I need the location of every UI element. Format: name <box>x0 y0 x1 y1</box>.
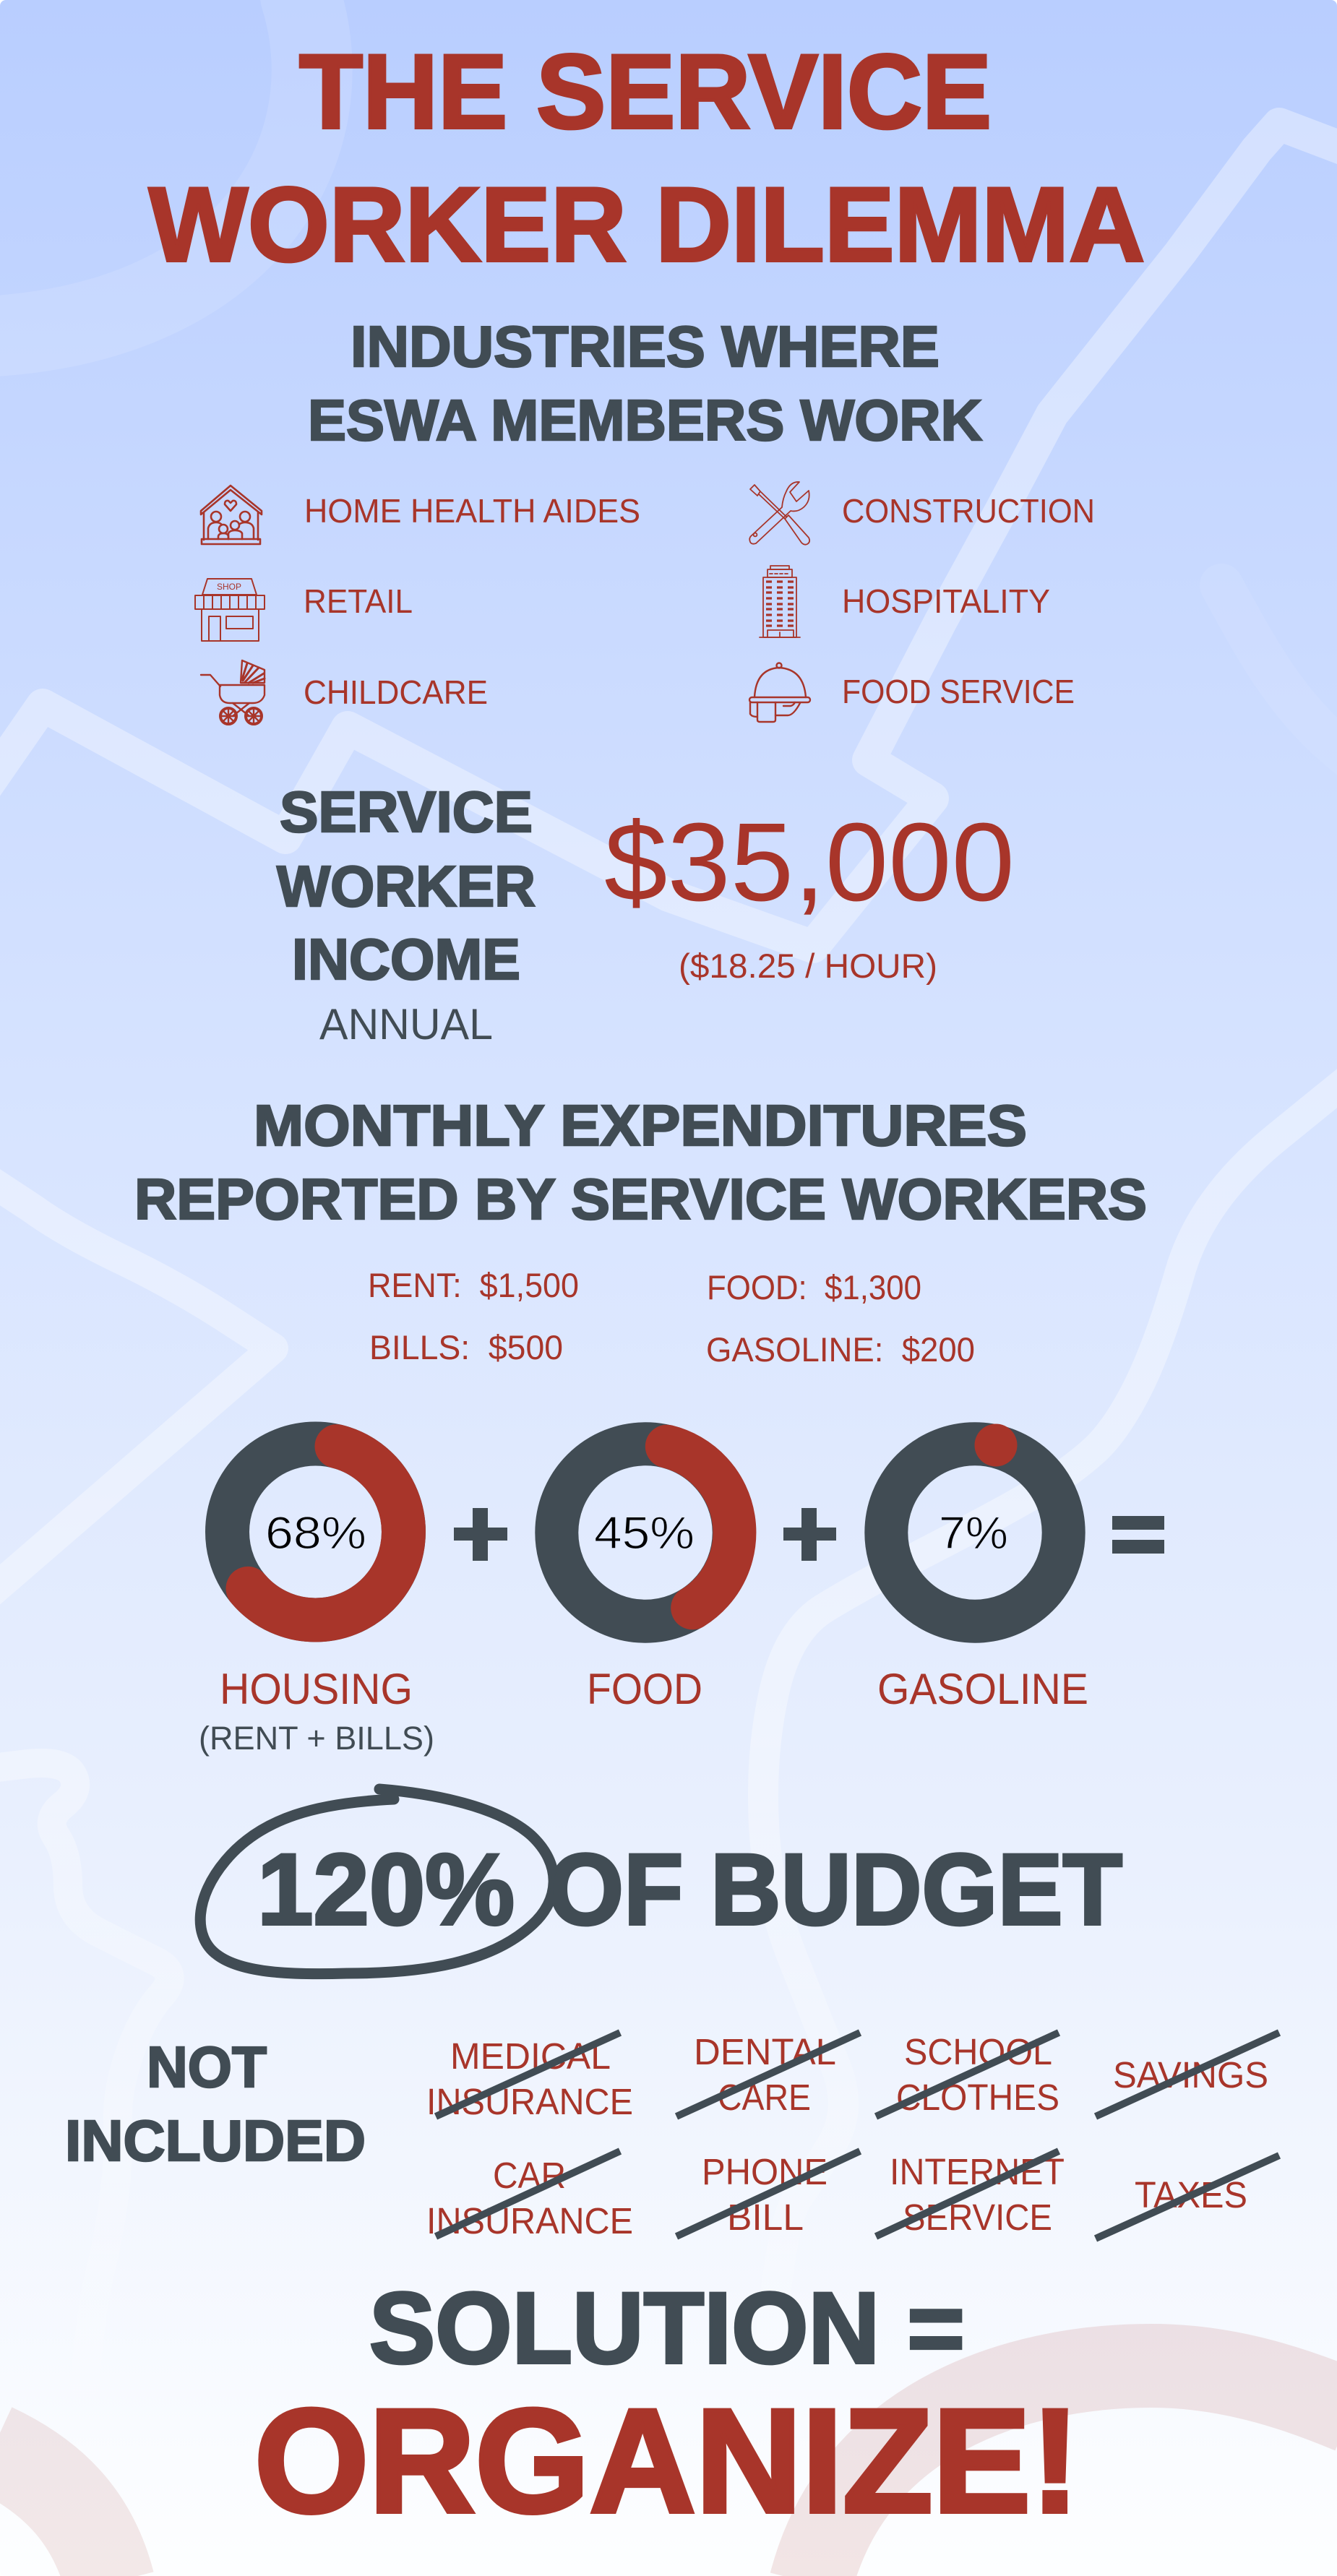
heading: industries: ESWA MEMBERS WORK <box>308 388 982 452</box>
icon: shop <box>195 579 265 641</box>
item: internet service: SERVICE <box>903 2197 1052 2238</box>
donut chart: housing: 68% <box>265 1508 366 1559</box>
expenditure amounts <box>368 1266 975 1369</box>
heading: monthly expenditures: MONTHLY EXPENDITURES <box>254 1093 1027 1158</box>
title: THE SERVICE <box>299 33 992 150</box>
not included heading: NOT <box>147 2035 267 2099</box>
heading: industries <box>308 314 982 452</box>
expenditure amounts: FOOD: $1,300 <box>707 1268 921 1306</box>
item: phone bill <box>676 2151 860 2238</box>
equals sign <box>1112 1516 1164 1554</box>
donut labels: GASOLINE <box>877 1665 1088 1713</box>
industries list <box>195 482 1095 724</box>
item: savings <box>1096 2033 1279 2116</box>
label: food service: FOOD SERVICE <box>842 673 1075 710</box>
donut chart: food: 45% <box>594 1508 695 1559</box>
not included heading: INCLUDED <box>65 2108 366 2173</box>
annual label: ANNUAL <box>319 1000 493 1048</box>
not included heading <box>65 2035 366 2173</box>
donut chart: gasoline: 7% <box>939 1508 1008 1559</box>
icon: shop: SHOP <box>217 582 241 592</box>
label: construction: CONSTRUCTION <box>842 492 1095 530</box>
120% of budget: 120% <box>257 1832 515 1946</box>
hand drawn circle <box>200 1789 554 1974</box>
service worker income heading <box>277 780 536 991</box>
icon: stroller <box>201 660 265 724</box>
icon: food cloche <box>749 663 810 722</box>
item: savings: SAVINGS <box>1113 2054 1268 2095</box>
label: retail: RETAIL <box>304 582 413 620</box>
item: internet service <box>876 2151 1065 2238</box>
item: school clothes <box>876 2031 1059 2118</box>
heading: industries: INDUSTRIES WHERE <box>351 314 940 379</box>
organize call to action: ORGANIZE! <box>254 2379 1080 2543</box>
item: phone bill: PHONE <box>702 2151 827 2192</box>
donut labels <box>220 1665 1088 1713</box>
icon: home health aides <box>201 486 262 544</box>
income amount: $35,000 <box>604 800 1015 924</box>
item: medical insurance: INSURANCE <box>426 2081 633 2122</box>
hourly rate: ($18.25 / HOUR) <box>679 947 937 985</box>
120% of budget: OF BUDGET <box>548 1832 1122 1946</box>
item: car insurance: CAR <box>493 2155 566 2196</box>
housing note: (RENT + BILLS) <box>199 1720 434 1757</box>
heading: monthly expenditures: REPORTED BY SERVICE WORKERS <box>134 1167 1147 1231</box>
donut chart: housing <box>227 1444 403 1620</box>
icon: hotel building <box>760 566 800 637</box>
label: childcare: CHILDCARE <box>304 673 488 711</box>
item: dental care: CARE <box>718 2077 811 2118</box>
120% of budget <box>257 1832 1122 1946</box>
service worker income heading: SERVICE <box>280 780 533 844</box>
item: car insurance: INSURANCE <box>426 2200 633 2241</box>
expenditure amounts: BILLS: $500 <box>369 1328 563 1366</box>
donut labels: HOUSING <box>220 1665 413 1713</box>
plus sign <box>454 1508 507 1561</box>
heading: monthly expenditures <box>134 1093 1147 1231</box>
item: phone bill: BILL <box>727 2197 804 2238</box>
donut labels: FOOD <box>587 1665 702 1713</box>
service worker income heading: INCOME <box>292 927 520 991</box>
crossed out items <box>426 2031 1279 2241</box>
item: medical insurance: MEDICAL <box>450 2036 611 2077</box>
item: dental care <box>676 2031 860 2118</box>
title <box>149 33 1145 283</box>
item: medical insurance <box>426 2033 633 2122</box>
item: school clothes: CLOTHES <box>896 2077 1059 2118</box>
item: internet service: INTERNET <box>890 2151 1065 2192</box>
item: taxes <box>1096 2155 1279 2239</box>
donut chart: food <box>556 1444 734 1621</box>
item: school clothes: SCHOOL <box>904 2031 1052 2072</box>
service worker income heading: WORKER <box>277 854 536 918</box>
expenditure amounts: GASOLINE: $200 <box>706 1330 975 1369</box>
item: car insurance <box>426 2151 633 2241</box>
plus sign <box>783 1508 836 1561</box>
donut chart: gasoline <box>886 1423 1064 1621</box>
item: taxes: TAXES <box>1135 2174 1247 2215</box>
expenditure amounts: RENT: $1,500 <box>368 1266 579 1304</box>
item: dental care: DENTAL <box>694 2031 836 2072</box>
label: hospitality: HOSPITALITY <box>842 582 1050 620</box>
title: WORKER DILEMMA <box>149 165 1145 283</box>
solution heading: SOLUTION = <box>369 2271 965 2385</box>
label: home health aides: HOME HEALTH AIDES <box>304 492 640 530</box>
icon: tools <box>749 482 809 545</box>
